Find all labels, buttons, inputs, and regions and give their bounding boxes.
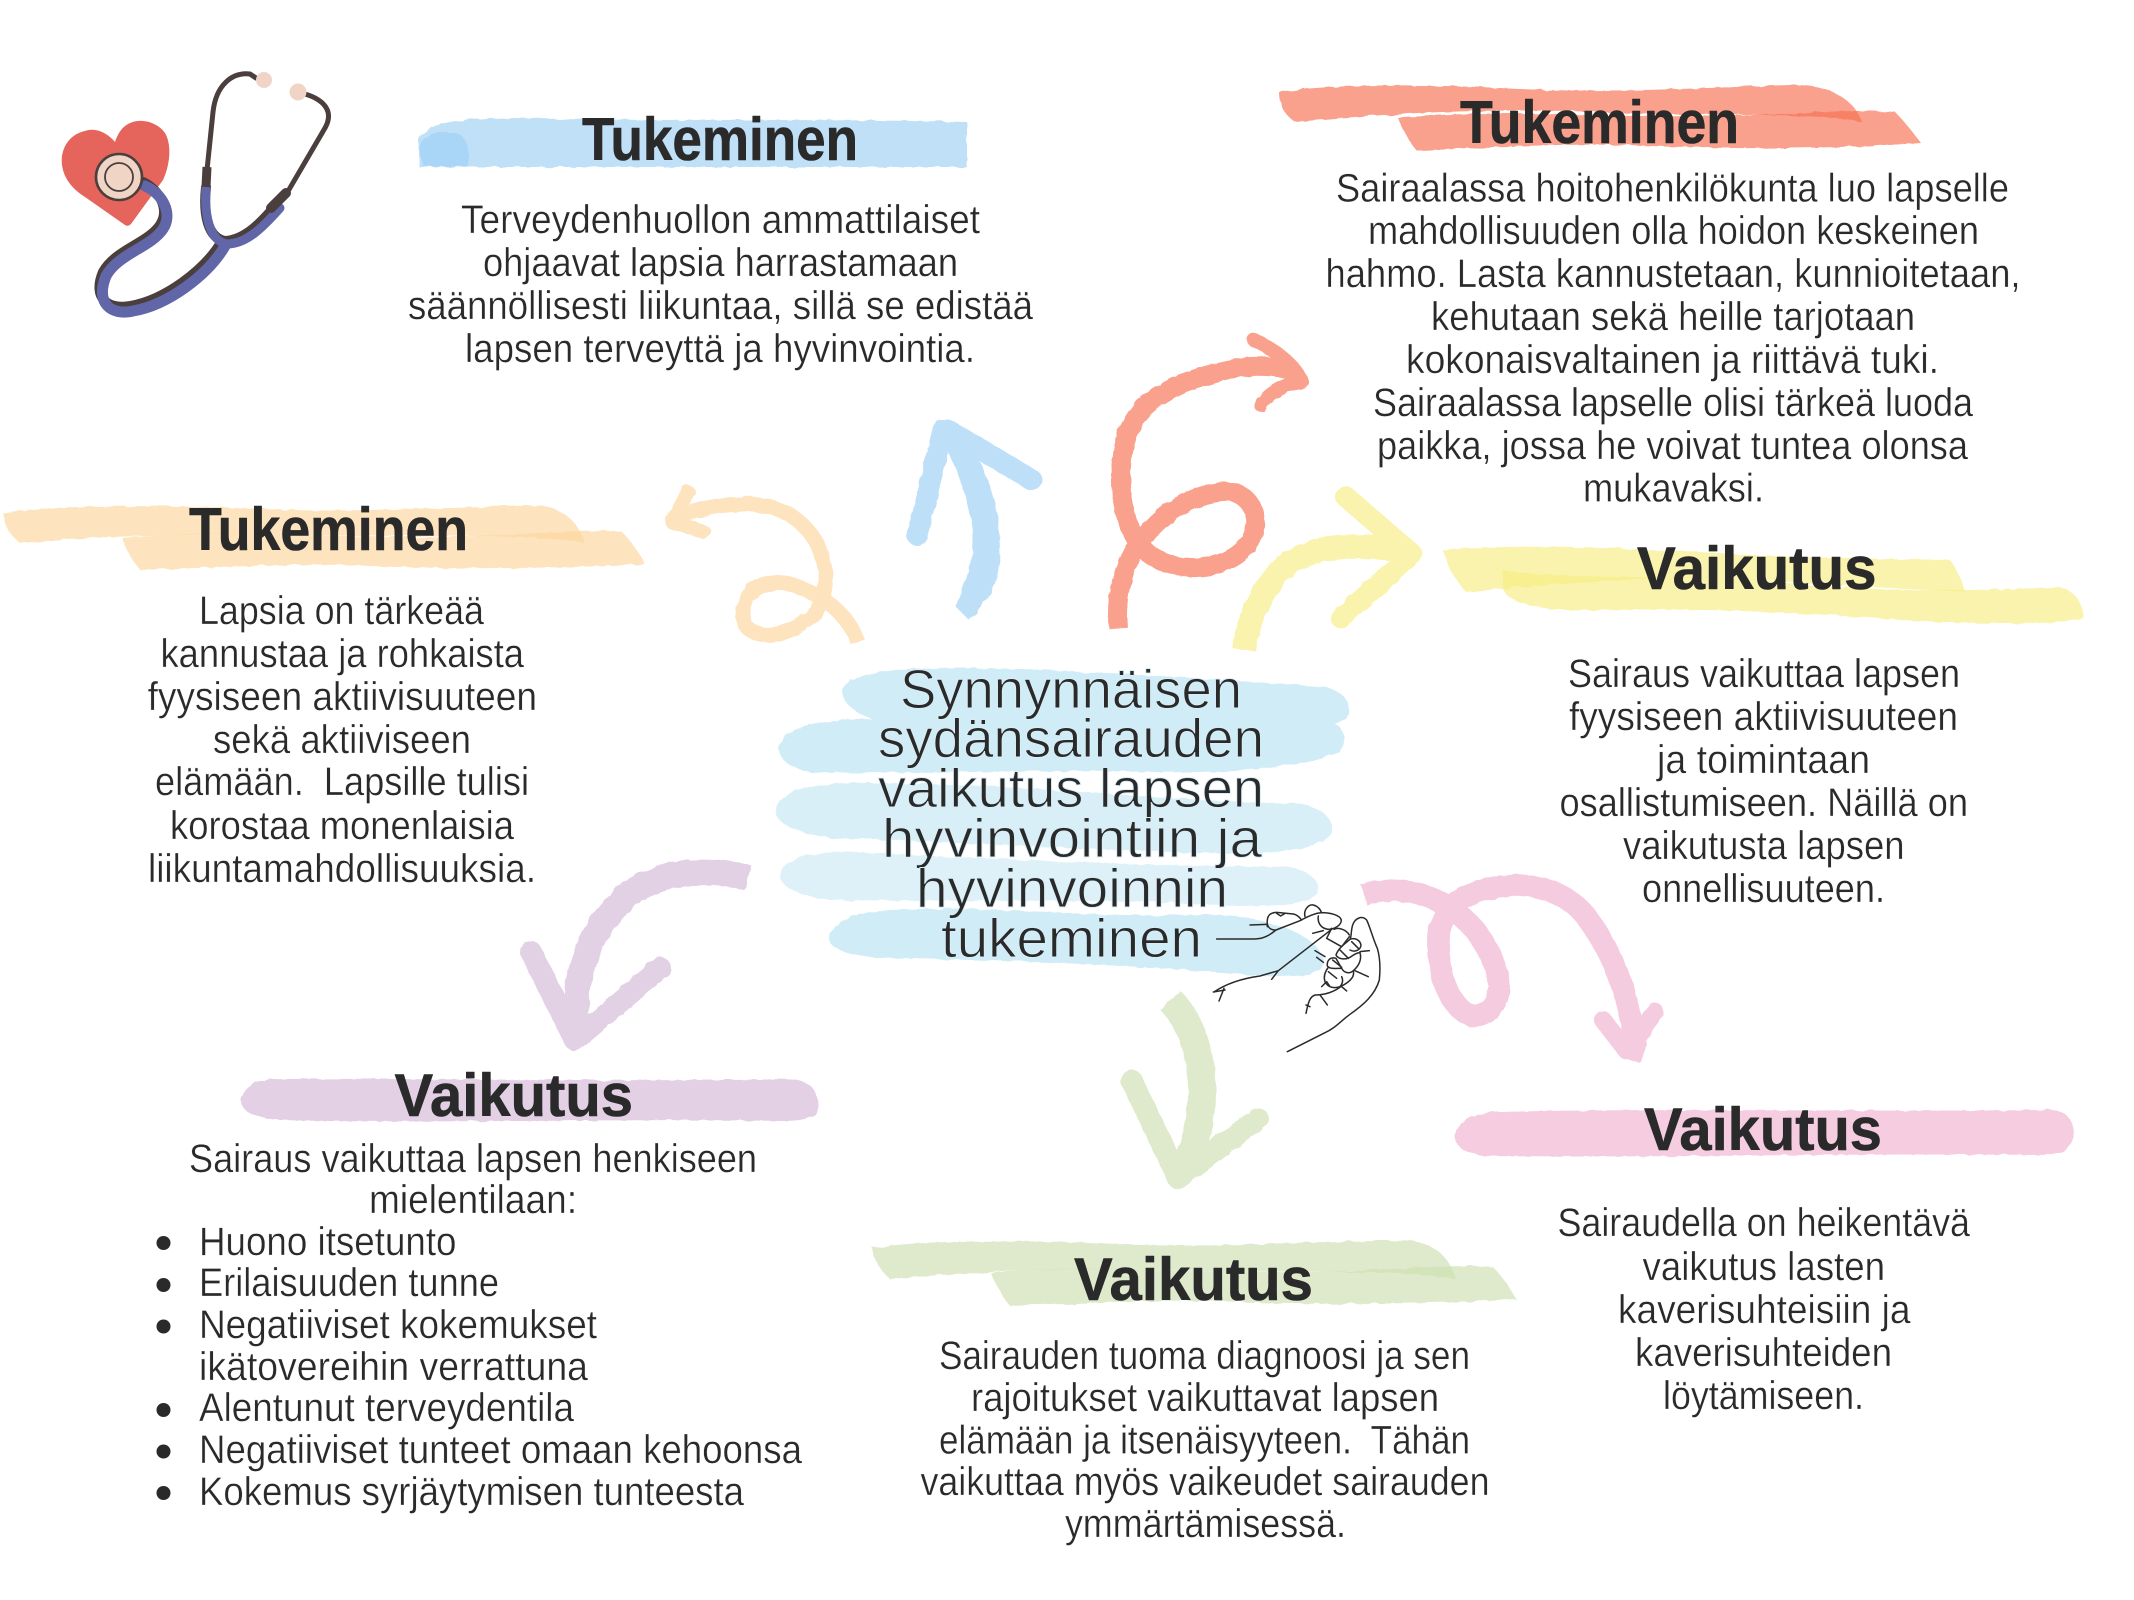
text block: sekä aktiiviseen: [213, 718, 471, 762]
bullet list: Kokemus syrjäytymisen tunteesta: [199, 1470, 745, 1514]
text block: Sairaalassa hoitohenkilökunta luo lapselle: [1336, 166, 2009, 210]
bullet list: Negatiiviset kokemukset: [199, 1303, 597, 1347]
panel: encouragement support: [3, 496, 645, 891]
text block: lapsen terveyttä ja hyvinvointia.: [465, 327, 975, 371]
text block: vaikutusta lapsen: [1623, 824, 1904, 868]
title: vaikutus lapsen: [878, 757, 1264, 819]
text block: Terveydenhuollon ammattilaiset: [461, 198, 980, 242]
icon: chest piece: [96, 154, 142, 200]
heading: Tukeminen: [189, 496, 468, 563]
text block: kaverisuhteisiin ja: [1618, 1288, 1911, 1332]
panel: mental state effect: [156, 1062, 818, 1514]
heading: Tukeminen: [1460, 89, 1739, 156]
brush: green: [873, 1241, 1456, 1279]
brush: yellow: [1443, 547, 1965, 592]
arrow: orange: [672, 492, 858, 642]
panel: friendships effect: [1455, 1096, 2074, 1418]
arrow: yellow: [1244, 497, 1412, 650]
text block: kehutaan sekä heille tarjotaan: [1431, 295, 1915, 339]
text block: fyysiseen aktiivisuuteen: [1569, 695, 1958, 739]
text block: onnellisuuteen.: [1642, 867, 1885, 911]
bullet list: ikätovereihin verrattuna: [199, 1345, 589, 1389]
text block: elämään ja itsenäisyyteen. Tähän: [939, 1418, 1470, 1462]
text block: Sairaus vaikuttaa lapsen: [1568, 652, 1960, 696]
icon: stethoscope tube: [99, 74, 328, 312]
heading: Vaikutus: [1074, 1246, 1313, 1313]
panel: independence effect: [873, 1241, 1516, 1546]
text block: ja toimintaan: [1656, 738, 1870, 782]
brush: salmon: [1279, 85, 1862, 122]
arrow: blue: [917, 423, 1032, 620]
text block: osallistumiseen. Näillä on: [1560, 781, 1968, 825]
text block: Sairaus vaikuttaa lapsen henkiseen: [189, 1137, 757, 1181]
bullet list: Huono itsetunto: [199, 1220, 456, 1264]
brush: yellow lower: [1502, 570, 2084, 624]
text block: hahmo. Lasta kannustetaan, kunnioitetaan,: [1326, 252, 2020, 296]
text block: mielentilaan:: [369, 1178, 577, 1222]
title: Synnynnäisen: [900, 658, 1242, 720]
text block: fyysiseen aktiivisuuteen: [148, 675, 537, 719]
heading: Vaikutus: [394, 1062, 633, 1129]
icon: stethoscope and heart: [62, 72, 328, 312]
text block: kokonaisvaltainen ja riittävä tuki.: [1406, 338, 1939, 382]
text block: rajoitukset vaikuttavat lapsen: [971, 1376, 1439, 1420]
brush: orange: [3, 506, 585, 543]
text block: [148, 589, 537, 891]
brush: salmon lower: [1398, 111, 1921, 150]
brush: pink: [1455, 1110, 2074, 1156]
arrow: pink: [1364, 885, 1655, 1060]
heading: Tukeminen: [582, 106, 858, 173]
text block: kaverisuhteiden: [1635, 1331, 1892, 1375]
text block: Sairauden tuoma diagnoosi ja sen: [939, 1334, 1470, 1378]
title: [878, 658, 1264, 969]
text block: [1326, 166, 2020, 510]
text block: mahdollisuuden olla hoidon keskeinen: [1368, 209, 1979, 253]
text block: Sairaudella on heikentävä: [1558, 1201, 1971, 1245]
panel: hospital support: [1279, 85, 2020, 510]
icon: ear tips: [256, 72, 306, 100]
title: hyvinvoinnin: [916, 857, 1228, 919]
text block: säännöllisesti liikuntaa, sillä se edistää: [408, 284, 1034, 328]
text block: kannustaa ja rohkaista: [160, 632, 525, 676]
text block: löytämiseen.: [1663, 1374, 1864, 1418]
text block: [1560, 652, 1968, 911]
text block: Lapsia on tärkeää: [199, 589, 485, 633]
text block: ymmärtämisessä.: [1065, 1502, 1346, 1546]
text block: Sairaalassa lapselle olisi tärkeä luoda: [1373, 381, 1974, 425]
panel: exercise support: [408, 106, 1034, 371]
brush: purple: [241, 1079, 818, 1121]
brush: central blue strokes: [776, 668, 1349, 976]
title: tukeminen: [941, 907, 1202, 969]
bullet list: Erilaisuuden tunne: [199, 1261, 499, 1305]
panel: central title: [776, 658, 1349, 976]
brush: blue: [419, 118, 967, 167]
heading: Vaikutus: [1644, 1096, 1882, 1163]
text block: korostaa monenlaisia: [170, 804, 515, 848]
panel: physical activity effect: [1443, 535, 2084, 911]
icon: heart: [62, 121, 169, 226]
arrow: green: [1132, 1000, 1258, 1178]
brush: orange lower: [122, 531, 645, 570]
text block: [189, 1137, 757, 1222]
bullet list: [156, 1220, 803, 1514]
text block: liikuntamahdollisuuksia.: [148, 847, 536, 891]
text block: elämään. Lapsille tulisi: [155, 760, 529, 804]
title: hyvinvointiin ja: [882, 807, 1262, 869]
icon: hands line drawing: [1213, 905, 1380, 1052]
heading: Vaikutus: [1637, 535, 1876, 602]
title: sydänsairauden: [878, 707, 1264, 769]
text block: [1558, 1201, 1971, 1418]
text block: [920, 1334, 1490, 1546]
bullet list: Negatiiviset tunteet omaan kehoonsa: [199, 1428, 803, 1472]
brush: green lower: [991, 1266, 1516, 1306]
text block: vaikuttaa myös vaikeudet sairauden: [920, 1460, 1490, 1504]
text block: vaikutus lasten: [1642, 1245, 1885, 1289]
text block: mukavaksi.: [1583, 466, 1764, 510]
text block: [408, 198, 1034, 371]
arrow: purple: [531, 872, 748, 1040]
text block: ohjaavat lapsia harrastamaan: [483, 241, 958, 285]
bullet list: Alentunut terveydentila: [199, 1386, 575, 1430]
text block: paikka, jossa he voivat tuntea olonsa: [1377, 424, 1969, 468]
arrow: salmon: [1117, 340, 1302, 628]
